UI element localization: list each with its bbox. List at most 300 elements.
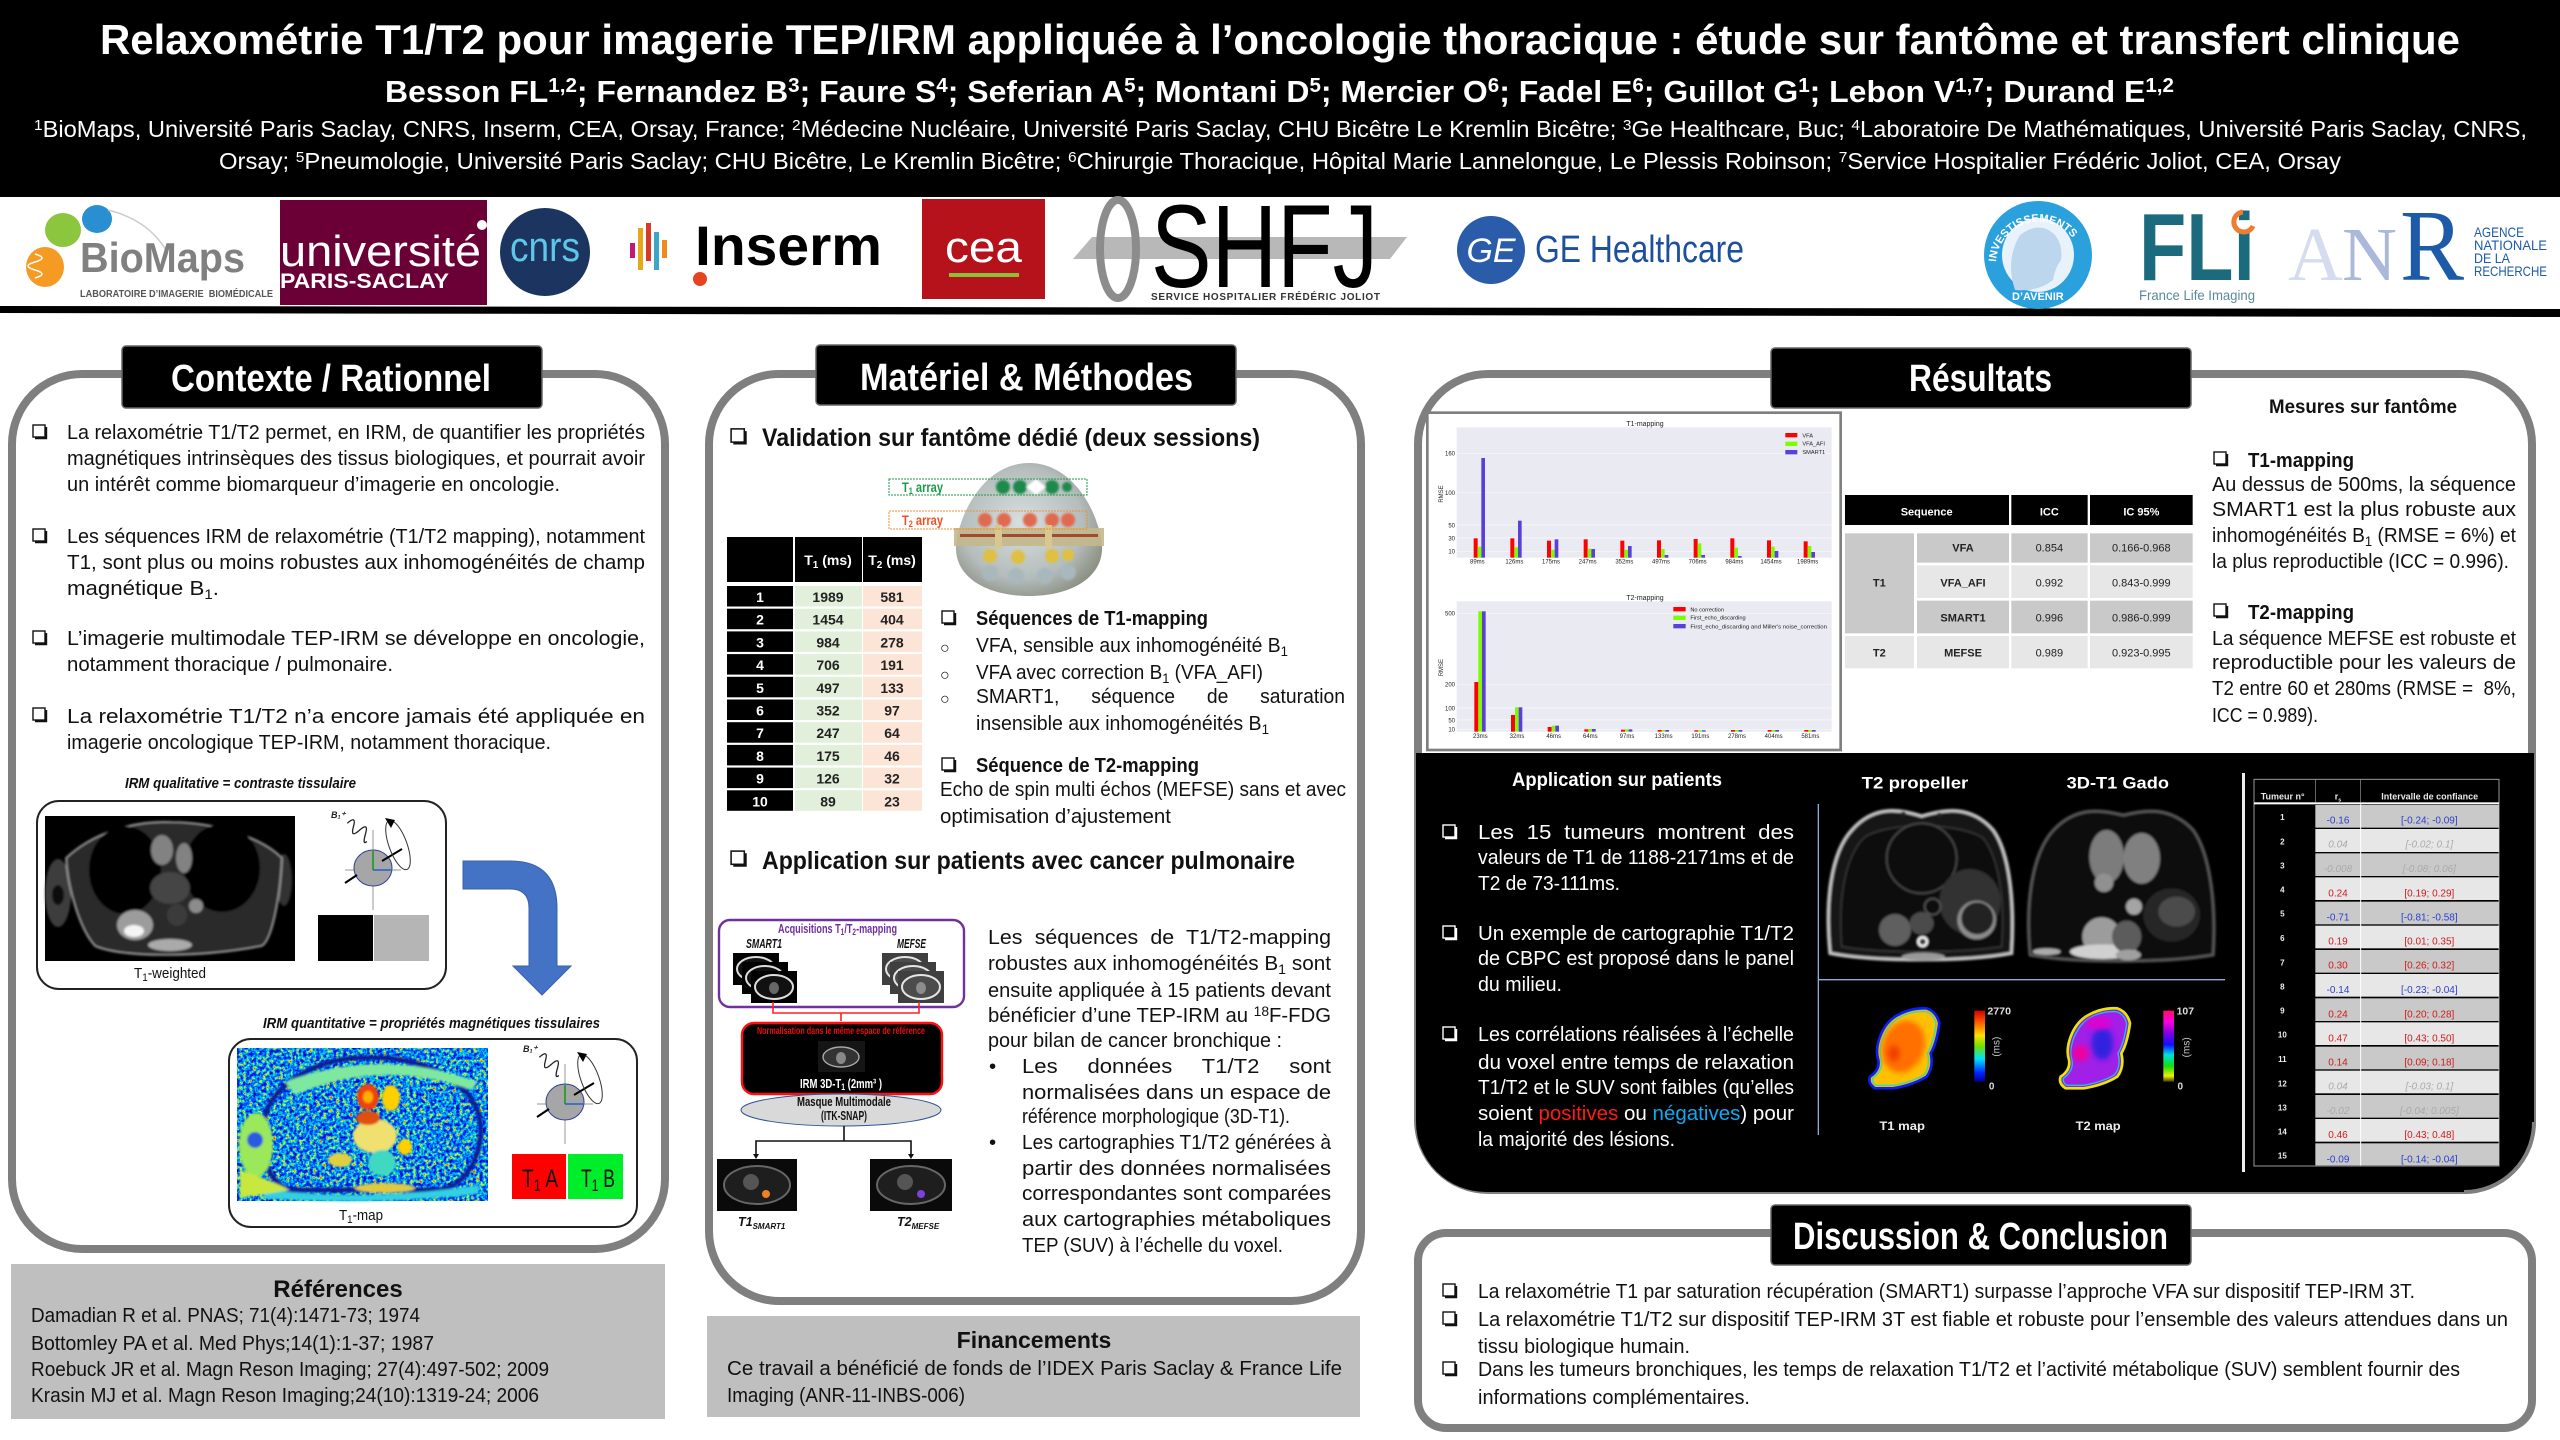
chart: T2-mapping: First_echo_discarding <box>1690 616 1746 622</box>
text: patient application: pour bilan de cancer bronchique : <box>988 1029 1282 1052</box>
table: phantom T1/T2 values: 247 <box>816 725 840 741</box>
text: application sur patients: de CBPC est proposé dans le panel <box>1478 947 1794 970</box>
affiliations: Service Hospitalier Frédéric Joliot, CEA, Orsay <box>1847 148 2342 174</box>
table: voxel correlation per tumour: 0.04 <box>2328 840 2348 851</box>
text: T1-mapping sequences: ○ <box>940 640 950 657</box>
table: phantom T1/T2 values: 9 <box>756 771 764 787</box>
logo: ANR: A <box>2288 213 2343 297</box>
logo: CNRS <box>500 208 590 296</box>
affiliations: Ge Healthcare, Buc; <box>1632 116 1851 142</box>
icon: spin diagram <box>331 810 415 910</box>
table: ICC reproducibility: 0.992 <box>2036 578 2063 590</box>
table: phantom T1/T2 values: 5 <box>756 680 764 696</box>
T1 A / T1 B squares: T <box>581 1165 596 1193</box>
text: contexte bullets: . <box>213 577 219 600</box>
text: contexte bullets: La relaxométrie T1/T2 n’a encore jamais été appliquée en <box>67 705 645 728</box>
output T1 image: T1 <box>738 1215 753 1229</box>
chart: T2-mapping: 133ms <box>1655 734 1673 740</box>
text: T1-mapping sequences: (VFA_AFI) <box>1169 661 1263 684</box>
image: phantom <box>889 463 1104 596</box>
table: ICC reproducibility: 0.843-0.999 <box>2112 578 2171 590</box>
text: contexte bullets: T1, sont plus ou moins robustes aux inhomogénéités de champ <box>67 551 645 574</box>
text: patient application: aux cartographies métaboliques <box>1022 1208 1331 1231</box>
text: T2-mapping sequence: Séquence de T2-mapping <box>976 754 1199 777</box>
authors: ; Montani D <box>1136 74 1309 109</box>
panel: financements <box>707 1316 1360 1417</box>
text: patient application: Les cartographies T1/T2 générées à <box>1022 1131 1332 1154</box>
caption: IRM quantitative: IRM quantitative = propriétés magnétiques tissulaires <box>263 1016 600 1032</box>
T1 A / T1 B squares: B <box>598 1165 615 1193</box>
logo: France Life Imaging: France Life Imaging <box>2139 287 2255 303</box>
logo band <box>0 181 2560 317</box>
chart: T2-mapping: 500 <box>1445 612 1456 618</box>
text: T1-mapping sequences: VFA avec correction B <box>976 661 1178 684</box>
heading: contexte: Contexte / Rationnel <box>171 358 491 400</box>
panel: contexte / rationnel <box>12 346 665 1249</box>
table: voxel correlation per tumour: 2 <box>2280 837 2285 846</box>
chart: T2-mapping: 10 <box>1448 728 1456 734</box>
text: conclusions: informations complémentaires. <box>1478 1386 1750 1409</box>
logo: Investissements d'avenir: D’AVENIR <box>2012 291 2064 303</box>
divider line <box>2242 773 2245 1172</box>
table: ICC reproducibility: SMART1 <box>1940 613 1986 625</box>
mask ellipse: (ITK-SNAP) <box>821 1109 867 1123</box>
text: application sur patients: Un exemple de cartographie T1/T2 <box>1478 922 1794 945</box>
authors: ; Lebon V <box>1810 74 1956 109</box>
text: conclusions <box>1443 1280 2508 1409</box>
text: contexte bullets: L’imagerie multimodale TEP-IRM se développe en oncologie, <box>67 627 645 650</box>
table: voxel correlation per tumour: 0.30 <box>2328 961 2348 972</box>
normalisation box: Normalisation dans le même espace de référence <box>757 1025 925 1037</box>
text: contexte bullets: imagerie oncologique TEP-IRM, notamment thoracique. <box>67 731 551 754</box>
logo: BioMaps <box>26 205 273 300</box>
authors: 1,7 <box>1955 75 1984 97</box>
table: voxel correlation per tumour: 9 <box>2280 1007 2285 1016</box>
label: T1-map: -map <box>353 1207 383 1224</box>
label: T2 map: T2 map <box>2076 1119 2121 1133</box>
table: voxel correlation per tumour: 10 <box>2278 1031 2287 1040</box>
affiliations: Médecine Nucléaire, Université Paris Saclay, CHU Bicêtre Le Kremlin Bicêtre; <box>801 116 1623 142</box>
chart: T2-mapping: 278ms <box>1728 734 1746 740</box>
arrow: qualitative to quantitative <box>463 861 571 995</box>
text: patient application: • <box>989 1131 996 1154</box>
chart: T2-mapping: 64ms <box>1583 734 1598 740</box>
logo: ANR: NATIONALE <box>2474 237 2547 253</box>
table: voxel correlation per tumour: 4 <box>2280 886 2285 895</box>
table: phantom T1/T2 values: 1989 <box>812 589 844 605</box>
table: phantom T1/T2 values: 10 <box>752 793 768 809</box>
text: patient application: • <box>989 1055 996 1078</box>
table: voxel correlation per tumour: 15 <box>2278 1152 2287 1161</box>
chart: T2-mapping: 50 <box>1448 718 1456 724</box>
table: voxel correlation per tumour: s <box>2338 797 2341 803</box>
table: ICC reproducibility: T2 <box>1873 648 1886 660</box>
text: patient application: ensuite appliquée à 15 patients devant <box>988 979 1331 1002</box>
chart: T1-mapping: 247ms <box>1579 560 1597 566</box>
affiliations <box>34 116 2527 174</box>
image: T1-weighted MRI <box>45 816 295 961</box>
table: phantom T1/T2 values: 3 <box>756 634 764 650</box>
panel: références: Krasin MJ et al. Magn Reson Imaging;24(10):1319-24; 2006 <box>31 1384 539 1407</box>
text: mesures sur fantôme: La séquence MEFSE est robuste et <box>2212 627 2516 650</box>
image: 3D-T1 Gado <box>2028 811 2214 961</box>
T1 A / T1 B squares: A <box>541 1165 558 1193</box>
T1 A / T1 B squares <box>512 1154 623 1199</box>
chart: T1-mapping: 89ms <box>1470 560 1485 566</box>
title: Relaxométrie T1/T2 pour imagerie TEP/IRM appliquée à l’oncologie thoracique : étude sur fantôme et transfert clinique <box>100 16 2460 63</box>
table: ICC reproducibility: VFA_AFI <box>1940 578 1986 590</box>
logo: SHFJ <box>1073 181 1407 313</box>
normalisation box: 1 <box>841 1082 845 1092</box>
text: T1-mapping sequences: 1 <box>1162 670 1170 686</box>
text: patient application: F-FDG <box>1269 1004 1331 1027</box>
table: voxel correlation per tumour: [0.43; 0.50] <box>2404 1033 2455 1044</box>
table: phantom T1/T2 values: 404 <box>880 612 904 628</box>
table: voxel correlation per tumour: [0.43; 0.48] <box>2404 1130 2455 1141</box>
acquisitions box <box>719 920 964 1007</box>
table: phantom T1/T2 values: 46 <box>884 748 900 764</box>
subheading: application sur patients: Application sur patients avec cancer pulmonaire <box>762 847 1295 875</box>
text: T1-mapping sequences: 1 <box>1281 643 1288 659</box>
chart: T2-mapping: 23ms <box>1473 734 1488 740</box>
affiliations: Orsay; <box>219 148 287 174</box>
chart: T1-mapping <box>1439 421 1832 566</box>
table: ICC reproducibility: 0.989 <box>2036 648 2063 660</box>
label: T1 map: T1 map <box>1879 1119 1925 1133</box>
output T2 image: T2 <box>897 1215 912 1229</box>
colorbar: T1: (ms) <box>1992 1037 2003 1057</box>
chart: T1-mapping: 126ms <box>1505 560 1523 566</box>
affiliations: 1 <box>34 117 43 134</box>
affiliations: 6 <box>1068 149 1077 166</box>
authors: ; Durand E <box>1984 74 2145 109</box>
acquisitions box: 2 <box>852 927 856 937</box>
chart: T1-mapping: 100 <box>1445 491 1456 497</box>
table: phantom T1/T2 values: 278 <box>880 634 904 650</box>
table: phantom T1/T2 values: 32 <box>884 771 900 787</box>
caption: IRM qualitative: IRM qualitative = contraste tissulaire <box>125 776 356 792</box>
text: application sur patients: la majorité des lésions. <box>1478 1128 1675 1151</box>
affiliations: 4 <box>1851 117 1860 134</box>
output T2 image <box>870 1159 952 1231</box>
table: phantom T1/T2 values: 6 <box>756 702 764 718</box>
table: phantom T1/T2 values: 497 <box>816 680 840 696</box>
logo: GE Healthcare <box>1457 216 1744 284</box>
table: phantom T1/T2 values: T <box>868 552 877 568</box>
logo: ANR: N <box>2342 213 2397 297</box>
colorbar: T1: 2770 <box>1987 1006 2011 1017</box>
table: voxel correlation per tumour: 0.14 <box>2328 1058 2348 1069</box>
table: voxel correlation per tumour: Tumeur n° <box>2261 792 2305 802</box>
colorbar: T1 <box>1974 1006 2011 1092</box>
table: voxel correlation per tumour: [-0.03; 0.1] <box>2404 1082 2453 1093</box>
acquisitions box: 1 <box>841 927 844 937</box>
logo: BioMaps: LABORATOIRE D’IMAGERIE BIOMÉDICALE <box>80 287 273 300</box>
T1 A / T1 B squares: 1 <box>592 1176 598 1195</box>
subheading: validation sur fantôme: Validation sur fantôme dédié (deux sessions) <box>762 424 1260 452</box>
table: phantom T1/T2 values: 2 <box>877 560 883 571</box>
heading: contexte <box>122 346 542 408</box>
authors: 6 <box>1488 75 1499 97</box>
T2 array label <box>889 511 1087 529</box>
output T1 image: SMART1 <box>753 1222 786 1231</box>
T1 A / T1 B squares: T <box>522 1165 537 1193</box>
T1 array label: T <box>902 480 910 495</box>
figure: patient example images: 3D-T1 Gado <box>2067 773 2169 792</box>
table: ICC reproducibility: MEFSE <box>1944 648 1982 660</box>
signal squares <box>318 915 429 961</box>
text: patient application: TEP (SUV) à l’échelle du voxel. <box>1022 1234 1283 1257</box>
table: phantom T1/T2 values: 4 <box>756 657 764 673</box>
affiliations: 3 <box>1623 117 1632 134</box>
table: voxel correlation per tumour: 0.24 <box>2328 1009 2348 1020</box>
arrows: mask to outputs <box>756 1126 911 1156</box>
acquisitions box: -mapping <box>856 922 897 936</box>
table: ICC reproducibility: ICC <box>2040 507 2059 519</box>
table: phantom T1/T2 values: 126 <box>816 771 840 787</box>
table: ICC reproducibility: 0.923-0.995 <box>2112 648 2171 660</box>
text: contexte bullets: La relaxométrie T1/T2 permet, en IRM, de quantifier les propriétés <box>67 421 645 444</box>
table: phantom T1/T2 values: 175 <box>816 748 840 764</box>
text: contexte bullets: notamment thoracique / pulmonaire. <box>67 653 393 676</box>
text: contexte bullets: 1 <box>204 586 213 602</box>
table: phantom T1/T2 values: (ms) <box>818 552 852 568</box>
authors: Besson FL <box>385 74 543 109</box>
table: voxel correlation per tumour: 14 <box>2278 1128 2287 1137</box>
normalisation box <box>742 1023 942 1094</box>
table: voxel correlation per tumour: -0.16 <box>2327 816 2350 827</box>
acquisitions box: /T <box>844 922 853 936</box>
text: mesures sur fantôme: ICC = 0.989). <box>2212 704 2318 727</box>
table: voxel correlation per tumour: [0.09; 0.18] <box>2404 1058 2455 1069</box>
chart: T2-mapping <box>1439 595 1832 740</box>
text: T1-mapping sequences <box>940 607 1345 737</box>
table: voxel correlation per tumour: 7 <box>2280 958 2285 967</box>
chart: T2-mapping: 97ms <box>1620 734 1634 740</box>
panel: références <box>11 1264 665 1419</box>
table: phantom T1/T2 values: (ms) <box>882 552 916 568</box>
table: voxel correlation per tumour: [-0.24; -0.09] <box>2401 816 2458 827</box>
label: T1-weighted: 1 <box>142 972 148 984</box>
panel: références: Damadian R et al. PNAS; 71(4):1471-73; 1974 <box>31 1304 420 1327</box>
authors: ; Fadel E <box>1499 74 1632 109</box>
table: phantom T1/T2 values: 984 <box>816 634 840 650</box>
text: conclusions: Dans les tumeurs bronchiques, les temps de relaxation T1/T2 et l’activité métabolique (SUV) semblent fournir des <box>1478 1358 2460 1381</box>
table: voxel correlation per tumour: Intervalle de confiance <box>2381 792 2478 802</box>
chart: T1-mapping: 1989ms <box>1797 560 1818 566</box>
text: mesures sur fantôme: (RMSE = 6%) et <box>2372 524 2516 547</box>
authors: 5 <box>1309 75 1321 97</box>
figure: T1-weighted <box>37 801 446 989</box>
chart: T1-mapping: 160 <box>1445 452 1456 458</box>
chart: T2-mapping: First_echo_discarding and Miller's noise_correction <box>1690 624 1827 630</box>
text: patient application: sont <box>1286 952 1331 975</box>
mask ellipse <box>741 1094 941 1126</box>
label: T1-weighted: T <box>134 965 143 982</box>
panel: matériel et méthodes <box>709 345 1361 1301</box>
text: patient application: 1 <box>1278 961 1286 977</box>
chart: RMSE bar charts <box>1427 413 1841 750</box>
text: patient application: Les séquences de T1/T2-mapping <box>988 926 1331 949</box>
label: T1-weighted: -weighted <box>148 965 206 982</box>
table: voxel correlation per tumour: r <box>2335 792 2338 802</box>
logo: Université Paris-Saclay: PARIS-SACLAY <box>280 270 449 293</box>
chart: T2-mapping: 200 <box>1445 683 1456 689</box>
chart: T2-mapping: 32ms <box>1510 734 1524 740</box>
map: T2 tumour <box>2060 1008 2130 1088</box>
text: application sur patients: T1/T2 et le SUV sont faibles (qu’elles <box>1478 1076 1794 1099</box>
authors: 6 <box>1632 75 1644 97</box>
panel: financements: Financements <box>957 1327 1111 1353</box>
affiliations: Pneumologie, Université Paris Saclay; CHU Bicêtre, Le Kremlin Bicêtre; <box>304 148 1068 174</box>
text: T2-mapping sequence <box>940 754 1346 828</box>
text: patient application: normalisées dans un espace de <box>1022 1081 1331 1104</box>
table: voxel correlation per tumour: [-0.14; -0.04] <box>2401 1154 2458 1165</box>
chart: T2-mapping: 581ms <box>1801 734 1819 740</box>
text: application sur patients: du voxel entre temps de relaxation <box>1478 1051 1794 1074</box>
logo: ANR: R <box>2400 190 2464 303</box>
table: phantom T1/T2 values: 23 <box>884 793 900 809</box>
text: conclusions: La relaxométrie T1/T2 sur dispositif TEP-IRM 3T est fiable et robuste pour l’ensemble des valeurs attendues dans un <box>1478 1308 2508 1331</box>
table: voxel correlation per tumour: -0.02 <box>2327 1106 2350 1117</box>
affiliations: 5 <box>296 149 304 166</box>
text: mesures sur fantôme: T1-mapping <box>2248 449 2354 472</box>
chart: T1-mapping: 497ms <box>1652 560 1670 566</box>
authors: ; Faure S <box>800 74 936 109</box>
panel: discussion et conclusion <box>1418 1205 2532 1428</box>
logo: CEA <box>922 199 1045 299</box>
table: phantom T1/T2 values: 1454 <box>812 612 844 628</box>
text: contexte bullets <box>33 421 645 754</box>
T1 array label <box>889 479 1087 496</box>
authors: 3 <box>788 75 800 97</box>
chart: T1-mapping: 30 <box>1448 536 1456 542</box>
table: ICC reproducibility: 0.166-0.968 <box>2112 543 2171 555</box>
table: voxel correlation per tumour: -0.71 <box>2327 912 2350 923</box>
logo: Inserm: Inserm <box>695 214 882 277</box>
map: T1 tumour <box>1869 1008 1939 1088</box>
T1 array label: 1 <box>909 486 913 496</box>
text: patient application: partir des données normalisées <box>1022 1157 1331 1180</box>
text: patient application: correspondantes sont comparées <box>1022 1182 1331 1205</box>
text: mesures sur fantôme: SMART1 est la plus robuste aux <box>2212 498 2517 521</box>
text: contexte bullets: magnétique B <box>67 577 194 600</box>
text: T2-mapping sequence: Echo de spin multi échos (MEFSE) sans et avec <box>940 778 1346 801</box>
logo: BioMaps: BioMaps <box>80 234 245 281</box>
acquisitions box: Acquisitions T <box>778 922 864 936</box>
authors: ; Fernandez B <box>577 74 788 109</box>
authors: 1,2 <box>2145 75 2174 97</box>
chart: T2-mapping: RMSE <box>1439 659 1445 676</box>
chart: T1-mapping: VFA_AFI <box>1802 442 1825 448</box>
table: ICC reproducibility: 0.854 <box>2036 543 2063 555</box>
table: phantom T1/T2 values: 2 <box>756 612 764 628</box>
chart: T1-mapping: 175ms <box>1542 560 1560 566</box>
text: patient application: bénéficier d’une TEP-IRM au <box>988 1004 1251 1027</box>
table: phantom T1/T2 values: 8 <box>756 748 764 764</box>
T2 array label: array <box>913 513 943 528</box>
chart: T2-mapping: 191ms <box>1691 734 1709 740</box>
logo: CEA: cea <box>945 223 1023 272</box>
affiliations: Chirurgie Thoracique, Hôpital Marie Lannelongue, Le Plessis Robinson; <box>1077 148 1839 174</box>
text: application sur patients: du milieu. <box>1478 973 1562 996</box>
text: patient application: robustes aux inhomogénéités B <box>988 952 1275 975</box>
table: voxel correlation per tumour: [0.19; 0.29] <box>2404 888 2455 899</box>
normalisation box: IRM 3D-T <box>800 1077 854 1091</box>
colorbar: T2: 107 <box>2177 1006 2194 1017</box>
colorbar: T2: (ms) <box>2182 1037 2193 1057</box>
table: voxel correlation per tumour: [-0.23; -0.04] <box>2401 985 2458 996</box>
logo: CNRS: cnrs <box>510 223 580 270</box>
chart: T1-mapping: SMART1 <box>1802 450 1825 456</box>
logo: GE Healthcare: GE Healthcare <box>1535 229 1744 271</box>
chart: T1-mapping: 10 <box>1448 550 1456 556</box>
table: ICC reproducibility: VFA <box>1952 543 1974 555</box>
logo: SHFJ: SHFJ <box>1151 181 1378 313</box>
table: voxel correlation per tumour: 1 <box>2280 813 2285 822</box>
text: contexte bullets: Les séquences IRM de relaxométrie (T1/T2 mapping), notamment <box>67 525 645 548</box>
table: voxel correlation per tumour <box>2254 779 2499 1166</box>
table: phantom T1/T2 values: 7 <box>756 725 764 741</box>
label: T1-map: T <box>339 1207 348 1224</box>
authors: 1,2 <box>548 75 577 97</box>
text: T1-mapping sequences: SMART1, séquence de saturation <box>976 685 1345 708</box>
table: phantom T1/T2 values: 581 <box>880 589 904 605</box>
arrow: acquisitions to normalisation <box>773 1002 919 1021</box>
table: ICC reproducibility: Sequence <box>1901 507 1953 519</box>
text: T1-mapping sequences: ○ <box>940 667 950 684</box>
logo: ANR <box>2288 190 2547 303</box>
image: T1 colour map <box>237 1048 488 1201</box>
chart: T1-mapping: 706ms <box>1689 560 1707 566</box>
text: conclusions: La relaxométrie T1 par saturation récupération (SMART1) surpasse l’approche VFA sur dispositif TEP-IRM 3T. <box>1478 1280 2415 1303</box>
logo: Université Paris-Saclay: université <box>280 227 481 276</box>
panel: financements: Ce travail a bénéficié de fonds de l’IDEX Paris Saclay & France Life <box>727 1357 1342 1380</box>
table: ICC reproducibility <box>1845 495 2193 668</box>
table: voxel correlation per tumour: 6 <box>2280 934 2285 943</box>
colorbar: T2 <box>2163 1006 2194 1092</box>
table: phantom T1/T2 values: 97 <box>884 702 900 718</box>
text: mesures sur fantôme: la plus reproductible (ICC = 0.996). <box>2212 550 2509 573</box>
chart: T1-mapping: T1-mapping <box>1626 421 1664 428</box>
logo: SHFJ: SERVICE HOSPITALIER FRÉDÉRIC JOLIOT <box>1151 290 1380 303</box>
authors: 5 <box>1124 75 1136 97</box>
table: voxel correlation per tumour: -0.008 <box>2324 864 2353 875</box>
table: phantom T1/T2 values: 191 <box>880 657 904 673</box>
heading: matériel et méthodes <box>816 345 1236 405</box>
text: patient application: 18 <box>1254 1003 1269 1019</box>
heading: résultats: Résultats <box>1909 358 2052 400</box>
table: voxel correlation per tumour: 0.19 <box>2328 937 2348 948</box>
chart: T2-mapping: 46ms <box>1546 734 1561 740</box>
output T2 image: MEFSE <box>912 1222 940 1231</box>
heading: résultats <box>1771 348 2191 408</box>
text: mesures sur fantôme: inhomogénéités B <box>2212 524 2376 547</box>
label: T1-map: 1 <box>347 1214 353 1226</box>
T2 array label: 2 <box>909 519 913 529</box>
table: voxel correlation per tumour: 5 <box>2280 910 2285 919</box>
mask ellipse: Masque Multimodale <box>797 1095 891 1109</box>
output T1 image <box>717 1159 797 1231</box>
text: mesures sur fantôme: T2-mapping <box>2248 601 2354 624</box>
logo: ANR: DE LA <box>2474 250 2511 266</box>
table: voxel correlation per tumour: 0.04 <box>2328 1082 2348 1093</box>
logo: Investissements d'avenir <box>1984 201 2092 309</box>
table: phantom T1/T2 values: 133 <box>880 680 904 696</box>
text: application sur patients: valeurs de T1 de 1188-2171ms et de <box>1478 846 1794 869</box>
text: mesures sur fantôme <box>2212 397 2517 727</box>
text: T1-mapping sequences: 1 <box>1262 721 1269 737</box>
